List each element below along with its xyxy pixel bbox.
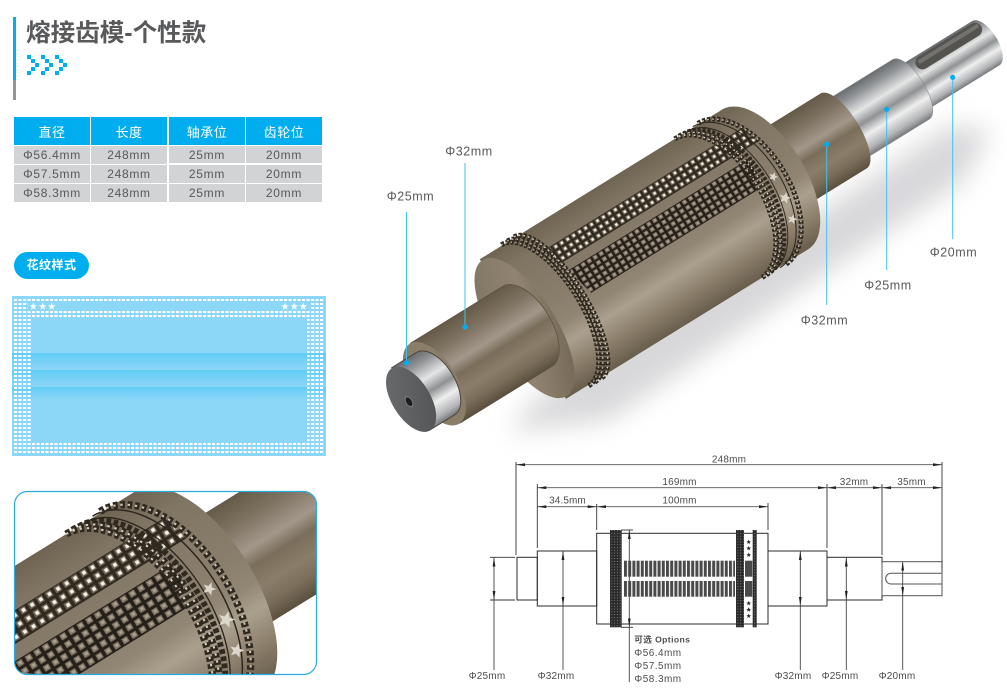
silver journal left [392, 342, 471, 430]
drawing dimension labels: 34.5mm [549, 496, 586, 506]
callout: phi 25 right: Φ25mm [864, 278, 912, 292]
drawing dimension labels: 32mm [840, 477, 868, 488]
callout: phi 20 right: Φ20mm [930, 246, 977, 260]
heading accent bar [13, 17, 16, 100]
pattern style pill: 花纹样式 [26, 258, 76, 272]
left flange face [455, 243, 594, 413]
horizontal dimension lines [516, 465, 942, 507]
roller photo illustration [351, 0, 1007, 479]
specification table: 20mm [266, 186, 302, 200]
specification table: 248mm [107, 167, 151, 181]
drawing dimension labels: Φ58.3mm [634, 674, 682, 685]
drawing dimension labels: Φ57.5mm [634, 661, 682, 672]
specification table [14, 117, 322, 202]
bronze step right [751, 85, 880, 211]
detail photo panel [14, 490, 318, 676]
callout: phi 20 right [930, 75, 977, 259]
specification table: 248mm [107, 186, 151, 200]
shaft end face with centre hole [376, 358, 446, 440]
shaft end with keyway [892, 15, 1007, 115]
specification table: Φ58.3mm [23, 186, 81, 200]
extension lines [490, 462, 942, 627]
specification table: 20mm [266, 148, 302, 162]
callout: phi 32 right [801, 142, 848, 328]
main body with teeth [479, 88, 843, 400]
drawing dimension labels [469, 454, 926, 685]
callout: phi 32 right: Φ32mm [801, 314, 848, 328]
lower tooth strip [569, 157, 768, 297]
specification table: 长度 [115, 124, 142, 140]
specification table: 齿轮位 [264, 124, 304, 140]
specification table: 20mm [266, 167, 302, 181]
callout: phi 25 right [864, 107, 912, 292]
left knurl ring [501, 222, 626, 386]
knurl and tooth bands [610, 530, 757, 627]
drawing dimension labels: Φ32mm [775, 671, 811, 682]
callout: phi 25 left [387, 190, 434, 365]
upper tooth strip [544, 125, 757, 267]
outline of stepped shaft [517, 533, 942, 624]
pattern style pill [14, 252, 89, 279]
drawing dimension labels: Φ56.4mm [634, 648, 682, 659]
drawing dimension labels: 248mm [712, 454, 746, 466]
drawing dimension labels: 100mm [662, 496, 697, 506]
bronze end face [390, 332, 479, 436]
callout: phi 25 left: Φ25mm [387, 190, 434, 204]
drawing dimension labels: Φ25mm [822, 671, 858, 682]
specification table: 25mm [189, 167, 225, 181]
specification table: 248mm [107, 148, 151, 162]
specification table: 25mm [189, 186, 225, 200]
icon: pixel chevrons [27, 55, 67, 75]
technical drawing [469, 454, 942, 685]
mask pattern panel [12, 296, 326, 456]
specification table: 直径 [38, 124, 66, 140]
title: 熔接齿模-个性款 [26, 20, 206, 47]
drawing dimension labels: 169mm [662, 477, 697, 488]
callout: phi 32 left [445, 144, 493, 330]
callout: phi 32 left: Φ32mm [445, 144, 493, 158]
drawing dimension labels: 可选 Options [634, 634, 690, 644]
star teeth on the roller [768, 171, 799, 225]
specification table: 轴承位 [187, 124, 227, 140]
silver bearing section [819, 52, 941, 164]
drawing dimension labels: Φ20mm [879, 671, 915, 682]
roller floor shadow [510, 125, 990, 432]
vertical dimension lines [494, 530, 903, 682]
specification table: Φ56.4mm [23, 148, 81, 162]
specification table: 25mm [189, 148, 225, 162]
drawing dimension labels: Φ32mm [538, 671, 574, 682]
right knurl ring [674, 98, 826, 279]
drawing dimension labels: Φ25mm [469, 671, 505, 682]
specification table: Φ57.5mm [23, 167, 81, 181]
bronze shaft left [411, 274, 572, 423]
drawing dimension labels: 35mm [897, 477, 926, 488]
